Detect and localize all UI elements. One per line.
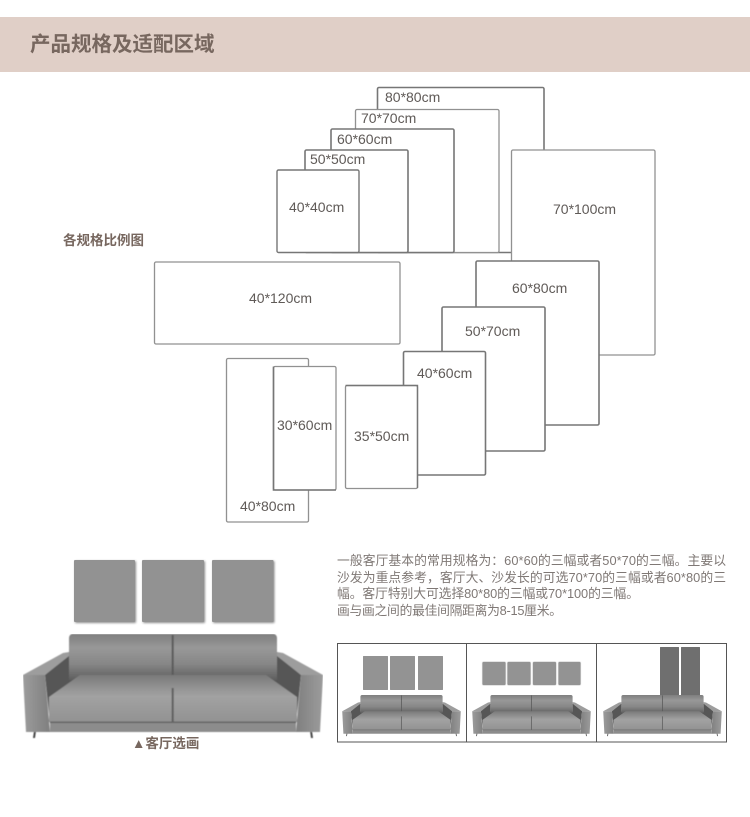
description text: 幅。客厅特别大可选择80*80的三幅或70*100的三幅。	[337, 586, 639, 601]
frame 40x40	[277, 170, 359, 252]
frame 40x60	[404, 352, 486, 475]
frame 80x80: 80*80cm	[385, 89, 440, 105]
frame 60x60: 60*60cm	[337, 131, 392, 147]
frame 80x80	[378, 88, 544, 252]
description text: 沙发为重点参考，客厅大、沙发长的可选70*70的三幅或者60*80的三	[337, 570, 726, 585]
frame 35x50: 35*50cm	[354, 428, 409, 444]
header band	[0, 17, 750, 72]
frame 35x50	[346, 386, 418, 488]
description text	[337, 553, 726, 618]
frame 30x60: 30*60cm	[277, 417, 332, 433]
example 3: two tall canvases behind sofa	[603, 647, 722, 736]
frame 70x70: 70*70cm	[361, 110, 416, 126]
caption: living room: ▲客厅选画	[132, 735, 199, 751]
frame 40x120: 40*120cm	[249, 290, 312, 306]
frame 40x40: 40*40cm	[289, 199, 344, 215]
frame 50x50: 50*50cm	[310, 151, 365, 167]
sofa	[23, 634, 323, 738]
frame 70x100: 70*100cm	[553, 201, 616, 217]
frame 60x80: 60*80cm	[512, 280, 567, 296]
frame 50x50	[305, 150, 408, 252]
description text: 一般客厅基本的常用规格为：60*60的三幅或者50*70的三幅。主要以	[337, 553, 726, 568]
frame 30x60	[274, 366, 336, 490]
frame 40x60: 40*60cm	[417, 365, 472, 381]
description text: 画与画之间的最佳间隔距离为8-15厘米。	[337, 603, 562, 618]
example panels	[338, 644, 726, 742]
size chart: square formats	[277, 88, 544, 252]
title: 产品规格及适配区域	[30, 33, 215, 56]
frame 70x70	[356, 110, 499, 252]
artwork: three square canvases	[74, 560, 274, 622]
frame 40x80: 40*80cm	[240, 498, 295, 514]
frame 40x80	[226, 358, 308, 522]
frame 50x70	[442, 307, 545, 451]
size chart: portrait formats	[346, 150, 655, 488]
main living room illustration	[23, 560, 323, 738]
frame 60x80	[476, 261, 599, 425]
frame 60x60	[331, 129, 454, 252]
example 1: three tall canvases	[342, 656, 461, 736]
frame 40x120	[154, 262, 400, 344]
frame 70x100	[512, 150, 655, 355]
example 2: four square canvases	[472, 662, 591, 736]
frame 50x70: 50*70cm	[465, 323, 520, 339]
label: size ratio chart: 各规格比例图	[63, 232, 144, 248]
